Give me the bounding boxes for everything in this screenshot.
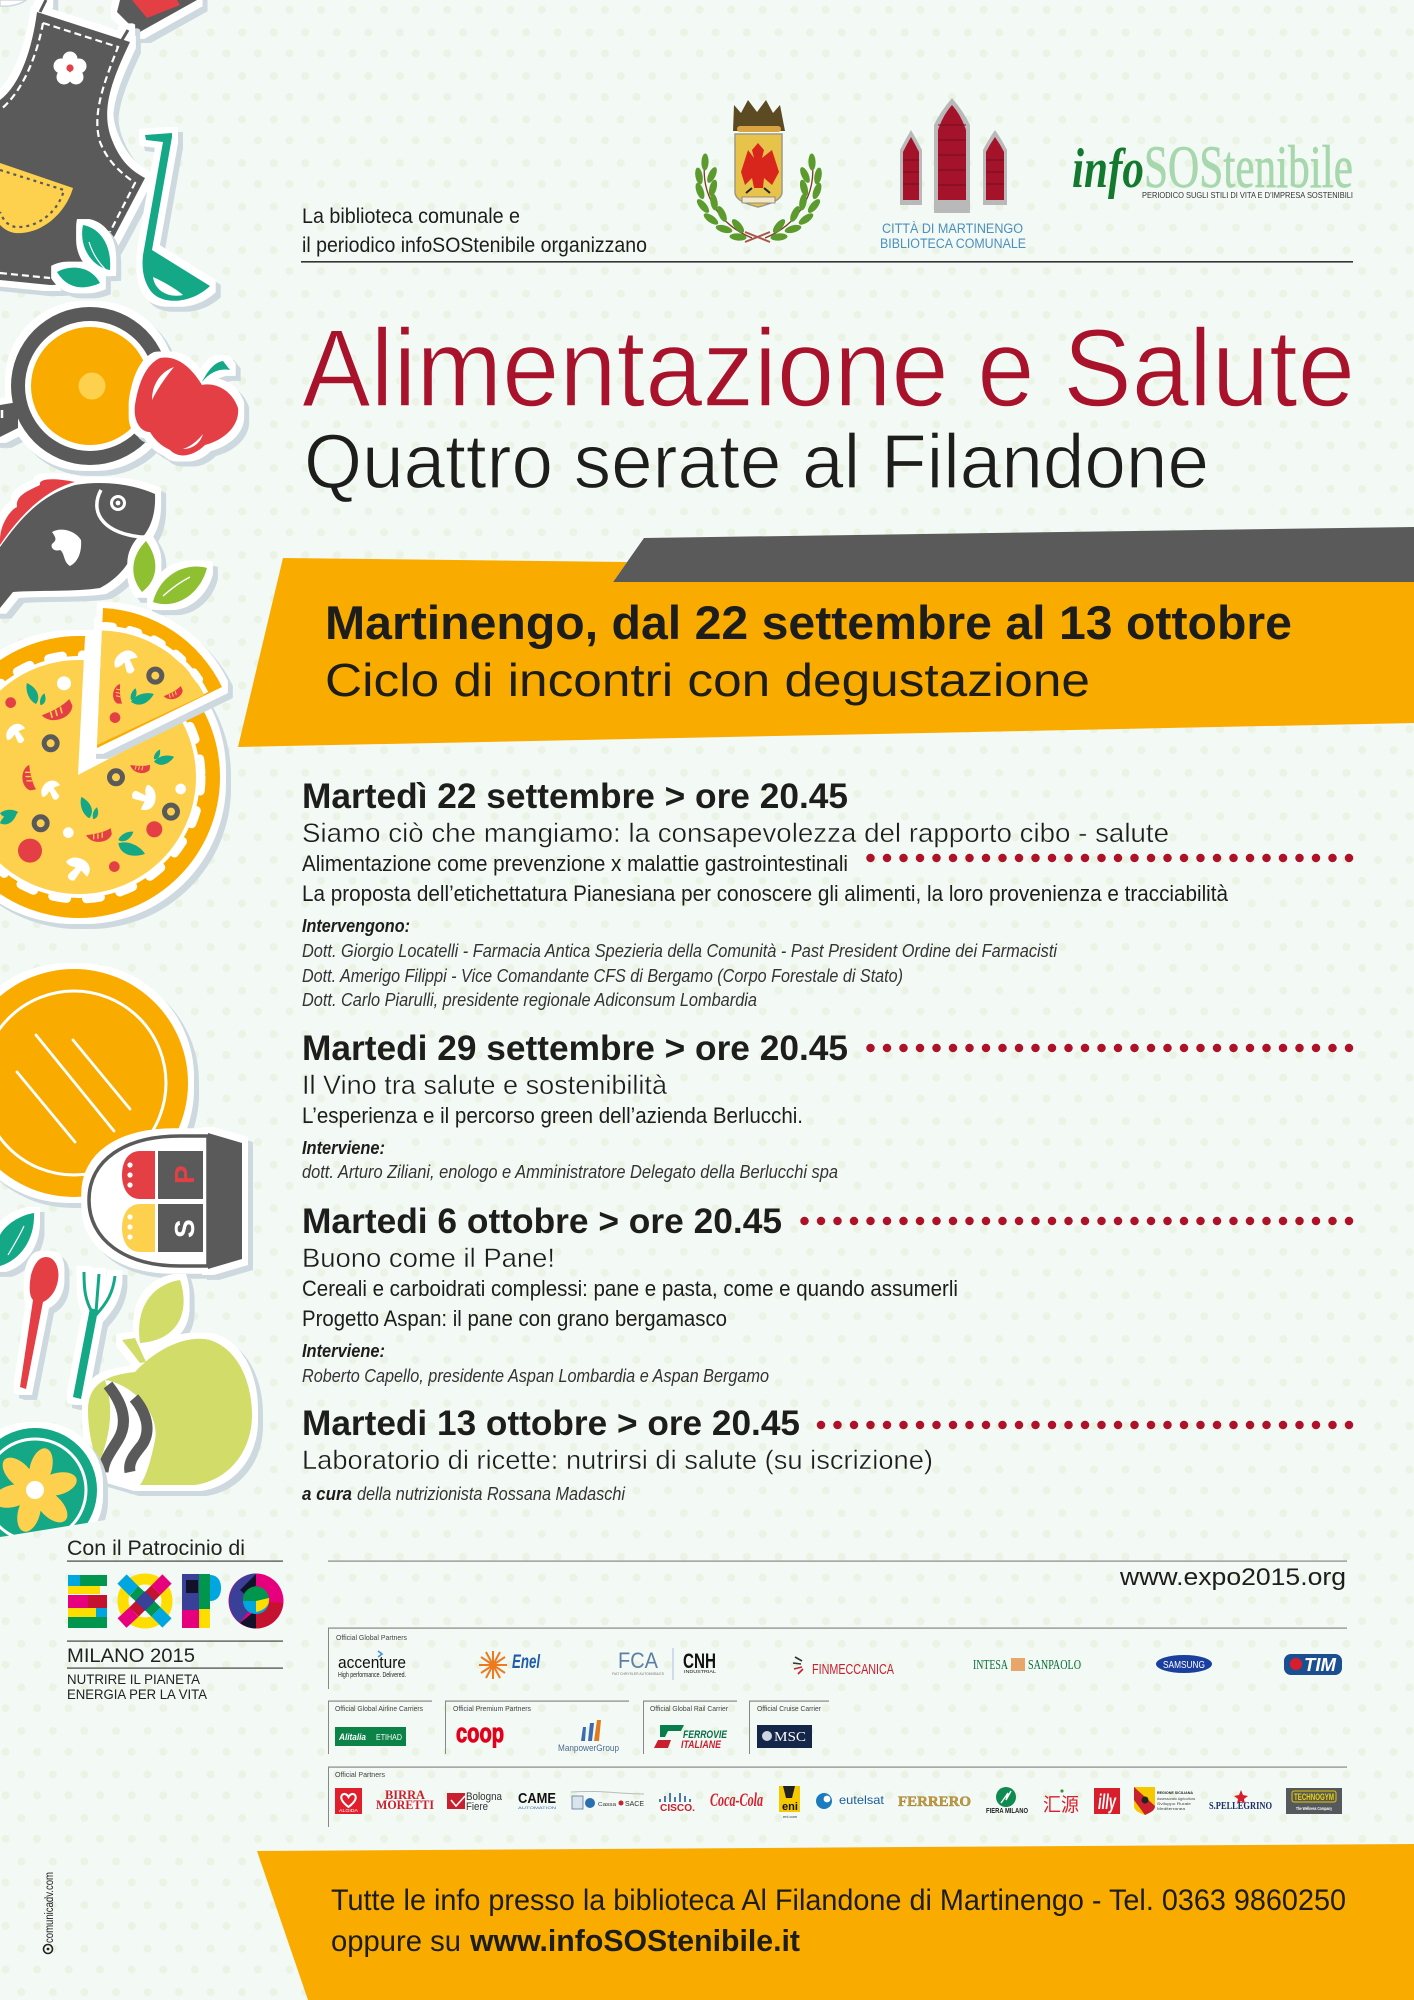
expo website: www.expo2015.org <box>1119 1564 1346 1591</box>
logo: Enel <box>479 1651 541 1679</box>
sponsors: global partners row <box>328 1628 1347 1689</box>
event 3: Progetto Aspan: il pane con grano bergamasco <box>302 1306 727 1331</box>
banner subheading: Ciclo di incontri con degustazione <box>325 654 1090 706</box>
footer: contact text <box>331 1884 1346 1958</box>
logo: coop: coop <box>456 1718 504 1748</box>
event 1: Dott. Amerigo Filippi - Vice Comandante CFS di Bergamo (Corpo Forestale di Stato) <box>302 965 903 986</box>
logo: SACE group: SACE <box>625 1801 644 1808</box>
logo: Cisco: CISCO. <box>660 1802 695 1814</box>
logo: Eutelsat <box>816 1793 885 1809</box>
logo: Finmeccanica: FINMECCANICA <box>812 1662 894 1678</box>
logo: infoSOStenibile: info <box>1072 138 1144 200</box>
label: P: P <box>169 1165 200 1184</box>
sponsors: carrier and premium boxes: Official Global Rail Carrier <box>650 1704 728 1713</box>
logo: TIM: TIM <box>1304 1655 1337 1675</box>
pizza toppings <box>0 676 186 887</box>
patronage: expo block: Con il Patrocinio di <box>67 1537 245 1560</box>
event 2 <box>302 1029 1349 1182</box>
logo: accenture <box>338 1651 406 1679</box>
footer: contact text: Tutte le info presso la biblioteca Al Filandone di Martinengo - Tel. 0363 9860250 <box>331 1884 1346 1917</box>
icon: teal leaf <box>0 1213 34 1266</box>
logo: illy <box>1094 1788 1120 1814</box>
logo: eni: eni <box>782 1801 798 1813</box>
event 2: Martedi 29 settembre > ore 20.45 <box>302 1029 848 1068</box>
agency credit: comunicadv.com <box>44 1872 56 1943</box>
logo: Fiera Milano: FIERA MILANO <box>986 1808 1028 1815</box>
logo: Birra Moretti: MORETTI <box>376 1797 434 1812</box>
event 3 <box>302 1202 1349 1386</box>
logo: Fiera Milano <box>986 1787 1028 1815</box>
logo text: Città di Martinengo: CITTÀ DI MARTINENGO <box>882 221 1023 236</box>
header: organisers text: La biblioteca comunale e <box>302 205 520 228</box>
logo: Algida: ALGIDA <box>339 1808 358 1813</box>
pizza cut gap <box>78 620 210 775</box>
sponsors: carrier and premium boxes: Official Cruise Carrier <box>757 1704 821 1713</box>
logo: Alitalia Etihad: ETIHAD <box>376 1733 402 1742</box>
logo: Intesa Sanpaolo: INTESA <box>973 1658 1009 1673</box>
logo: Alitalia Etihad: Alitalia <box>338 1732 366 1742</box>
header: organisers text <box>302 205 647 257</box>
logo text: Città di Martinengo <box>880 221 1026 251</box>
event 4: Laboratorio di ricette: nutrirsi di salute (su iscrizione) <box>302 1445 933 1475</box>
event 3: Interviene: <box>302 1340 385 1361</box>
footer: contact text: oppure su <box>331 1925 461 1958</box>
event 2: L’esperienza e il percorso green dell’azienda Berlucchi. <box>302 1103 803 1128</box>
logo: infoSOStenibile: PERIODICO SUGLI STILI DI VITA E D’IMPRESA SOSTENIBILI <box>1142 190 1353 200</box>
logo: ManpowerGroup: ManpowerGroup <box>558 1743 619 1754</box>
logo: Regione Siciliana: Mediterranea <box>1157 1807 1185 1811</box>
title: Alimentazione e Salute <box>302 307 1355 430</box>
event 3: Roberto Capello, presidente Aspan Lombardia e Aspan Bergamo <box>302 1365 769 1386</box>
logo: Cisco <box>660 1793 695 1814</box>
logo: Technogym: The Wellness Company <box>1296 1806 1332 1811</box>
slice toppings <box>110 648 184 723</box>
logo: MSC: MSC <box>774 1730 806 1745</box>
label: S: S <box>169 1219 200 1238</box>
sponsors: official partners row: Official Partners <box>335 1770 385 1779</box>
logo: eni: eni.com <box>783 1814 798 1819</box>
banner: grey stripe <box>613 527 1414 582</box>
logo: Samsung <box>1156 1655 1212 1673</box>
sponsors: global partners row: Official Global Partners <box>336 1633 407 1642</box>
logo: accenture: High performance. Delivered. <box>338 1672 406 1679</box>
event 1: Dott. Carlo Piarulli, presidente regionale Adiconsum Lombardia <box>302 989 757 1010</box>
footer: orange panel <box>257 1844 1414 2000</box>
event 1: Martedì 22 settembre > ore 20.45 <box>302 777 848 816</box>
logo: FCA: FIAT CHRYSLER AUTOMOBILES <box>612 1671 664 1676</box>
sponsors: carrier and premium boxes: Official Premium Partners <box>453 1704 531 1713</box>
icon: red spoon <box>20 1257 58 1389</box>
logo: Bologna Fiere: Fiere <box>466 1801 488 1813</box>
header: organisers text: il periodico infoSOStenibile organizzano <box>302 234 647 257</box>
icon: teal leaves <box>57 225 110 287</box>
event 1: Intervengono: <box>302 915 410 936</box>
sponsors: official partners row <box>328 1766 1347 1827</box>
icon: teal fork <box>73 1272 115 1399</box>
icon: green leaves <box>133 541 207 604</box>
logo: illy: illy <box>1098 1791 1117 1814</box>
logo: eni <box>779 1786 800 1819</box>
logo: Algida <box>335 1788 362 1814</box>
event 1: Alimentazione come prevenzione x malattie gastrointestinali <box>302 851 848 876</box>
icon: red apple <box>135 357 238 455</box>
logo: Ferrovie Italiane: FERROVIE <box>683 1729 728 1741</box>
icon: pizza <box>0 636 220 918</box>
event 4: Martedi 13 ottobre > ore 20.45 <box>302 1404 800 1443</box>
event 4: della nutrizionista Rossana Madaschi <box>357 1483 626 1504</box>
logo: town crest <box>694 100 823 242</box>
logo: Intesa Sanpaolo <box>973 1658 1081 1673</box>
event 2: dott. Arturo Ziliani, enologo e Amministratore Delegato della Berlucchi spa <box>302 1161 838 1182</box>
logo: Alitalia Etihad <box>335 1727 406 1746</box>
logo: Finmeccanica <box>793 1657 894 1678</box>
logo: SACE group <box>571 1791 644 1809</box>
logo: Technogym <box>1286 1788 1342 1814</box>
logo: infoSOStenibile <box>1072 134 1353 200</box>
logo: FCA <box>612 1648 674 1680</box>
icon: orange plate <box>0 969 188 1197</box>
logo: Came: CAME <box>518 1790 556 1807</box>
logo: S.Pellegrino <box>1209 1790 1272 1812</box>
event 1: Dott. Giorgio Locatelli - Farmacia Antica Spezieria della Comunità - Past President Ordine dei Farmacisti <box>302 940 1058 961</box>
icon: citrus disc <box>0 1428 97 1552</box>
logo: MSC <box>757 1725 812 1748</box>
logo: EXPO <box>68 1574 284 1628</box>
event 3: Cereali e carboidrati complessi: pane e pasta, come e quando assumerli <box>302 1276 958 1301</box>
patronage: expo block: ENERGIA PER LA VITA <box>67 1687 207 1702</box>
logo: Huiyuan: 汇源 <box>1043 1794 1079 1816</box>
logo: Bologna Fiere: Bologna <box>466 1791 503 1803</box>
sticker: apron <box>0 0 145 285</box>
logo: Birra Moretti: BIRRA <box>385 1787 426 1802</box>
logo text: Città di Martinengo: BIBLIOTECA COMUNALE <box>880 236 1026 251</box>
icon: frying pan <box>0 307 169 465</box>
sponsors: carrier and premium boxes <box>328 1700 829 1754</box>
sticker: top left fragment <box>0 0 26 6</box>
patronage: expo block: NUTRIRE IL PIANETA <box>67 1672 200 1687</box>
sticker: bottle top <box>117 0 197 33</box>
footer: contact text: www.infoSOStenibile.it <box>469 1923 800 1958</box>
logo: FCA: FCA <box>618 1648 658 1673</box>
event 3: Martedi 6 ottobre > ore 20.45 <box>302 1202 782 1241</box>
event 1 <box>302 777 1349 1010</box>
logo: Regione Siciliana <box>1134 1787 1195 1815</box>
logo: TIM <box>1284 1654 1342 1675</box>
icon: ladle <box>143 133 210 301</box>
event 4 <box>302 1404 1349 1504</box>
icon: green apple <box>88 1280 252 1485</box>
logo: Came: AUTOMATION <box>518 1806 557 1810</box>
logo: CNH: CNH <box>683 1650 716 1673</box>
logo: library towers <box>900 98 1007 213</box>
logo: Intesa Sanpaolo: SANPAOLO <box>1028 1658 1081 1673</box>
logo: Coca-Cola: Coca-Cola <box>710 1790 763 1811</box>
event 1: La proposta dell’etichettatura Pianesiana per conoscere gli alimenti, la loro provenienza e tracciabilità <box>302 881 1229 906</box>
sponsors: carrier and premium boxes: Official Global Airline Carriers <box>335 1704 423 1713</box>
banner heading: Martinengo, dal 22 settembre al 13 ottobre <box>325 596 1292 649</box>
logo: Ferrovie Italiane <box>654 1725 728 1751</box>
event 1: Siamo ciò che mangiamo: la consapevolezza del rapporto cibo - salute <box>302 818 1169 848</box>
logo: Technogym: TECHNOGYM <box>1294 1792 1334 1802</box>
logo: accenture: accenture <box>338 1653 406 1672</box>
logo: Regione Siciliana: Assessorato Agricoltura <box>1157 1797 1195 1801</box>
patronage: expo block: MILANO 2015 <box>67 1646 195 1667</box>
icon: fish <box>0 479 155 608</box>
event 3: Buono come il Pane! <box>302 1243 555 1273</box>
logo: Bologna Fiere <box>447 1791 503 1813</box>
logo: Ferrero: FERRERO <box>898 1794 971 1810</box>
logo: Eutelsat: eutelsat <box>839 1793 885 1807</box>
icon: salt and pepper shakers <box>89 1133 242 1269</box>
logo: Ferrovie Italiane: ITALIANE <box>681 1739 722 1751</box>
logo: Birra Moretti <box>376 1787 434 1812</box>
logo: Samsung: SAMSUNG <box>1163 1659 1205 1671</box>
logo: CNH: INDUSTRIAL <box>684 1669 717 1674</box>
logo: SACE group: Cassa <box>598 1802 616 1808</box>
banner: orange <box>238 558 1414 747</box>
subtitle: Quattro serate al Filandone <box>304 419 1209 505</box>
icon: pizza slice <box>97 608 222 748</box>
logo: Regione Siciliana: Sviluppo Rurale <box>1157 1802 1191 1806</box>
event 2: Interviene: <box>302 1137 385 1158</box>
patronage: expo block <box>67 1537 284 1702</box>
event 2: Il Vino tra salute e sostenibilità <box>302 1070 668 1100</box>
logo: S.Pellegrino: S.PELLEGRINO <box>1209 1801 1272 1812</box>
logo: ManpowerGroup <box>558 1720 619 1754</box>
logo: Regione Siciliana: REGIONE SICILIANA <box>1157 1790 1193 1795</box>
logo: Enel: Enel <box>512 1652 541 1673</box>
event 4: a cura <box>302 1483 352 1504</box>
